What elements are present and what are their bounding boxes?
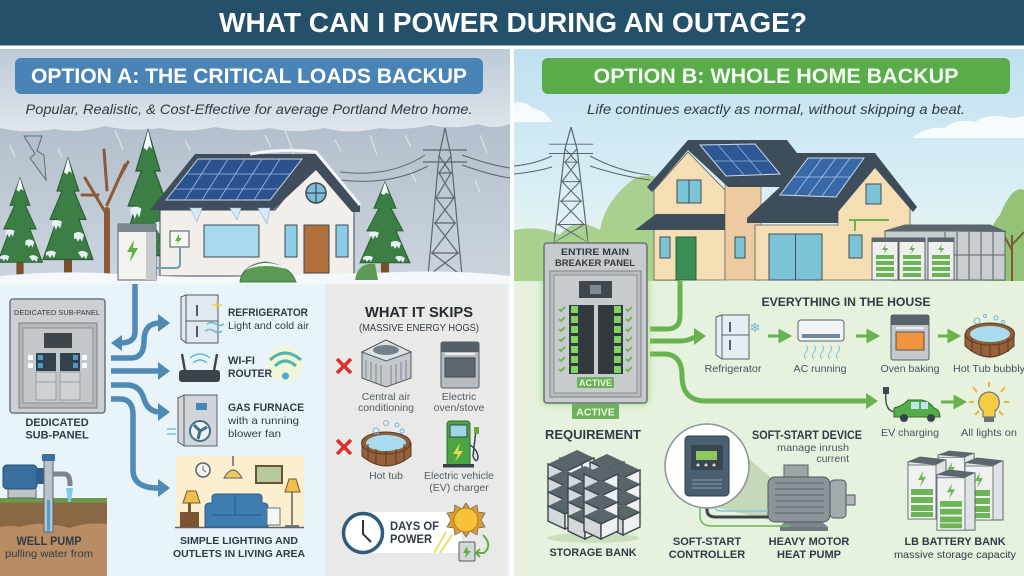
controller xyxy=(685,436,729,496)
label: soft-start device xyxy=(752,430,862,465)
sub-panel: DEDICATED SUB-PANEL xyxy=(14,308,100,317)
section heading: option A: OPTION A: THE CRITICAL LOADS BACKUP xyxy=(31,65,467,88)
main breaker panel: BREAKER PANEL xyxy=(555,258,635,269)
label: battery bank xyxy=(894,536,1017,561)
item: light bulb: All lights on xyxy=(961,427,1017,439)
x mark row 1 xyxy=(337,359,351,373)
clouds xyxy=(514,102,1024,138)
item: AC xyxy=(794,320,847,375)
section heading: option B xyxy=(542,58,1010,94)
panel: what it skips xyxy=(326,284,507,576)
item: gas furnace: GAS FURNACE xyxy=(228,402,304,414)
motor xyxy=(768,465,855,531)
label: EV charger: Electric vehicle xyxy=(424,470,494,482)
panel: option B xyxy=(514,49,1024,576)
label: hot tub: Hot tub xyxy=(369,470,403,482)
two-storey house xyxy=(635,140,917,280)
green conduit xyxy=(849,220,889,231)
icon: EV charger xyxy=(443,421,479,468)
icon: battery xyxy=(459,535,488,561)
well pump xyxy=(0,454,107,576)
power tower xyxy=(514,127,650,242)
panel: option A xyxy=(0,49,510,576)
breaker columns xyxy=(559,305,632,374)
storage bank xyxy=(547,450,640,543)
label: heavy motor: HEAT PUMP xyxy=(777,549,841,561)
label: central air: conditioning xyxy=(358,402,414,414)
heading: WHAT IT SKIPS xyxy=(365,304,473,321)
item: AC: AC running xyxy=(794,363,847,375)
sky scene xyxy=(514,49,1024,281)
icicles xyxy=(190,208,270,224)
solar panels xyxy=(700,144,780,176)
wires xyxy=(700,496,790,526)
well pump: WELL PUMP xyxy=(16,536,82,548)
item: wi-fi router xyxy=(179,346,303,382)
icon: hot tub xyxy=(362,420,411,466)
arrow xyxy=(938,331,958,341)
label: soft-start device: current xyxy=(816,453,849,465)
label: central air: Central air xyxy=(362,391,411,403)
house with solar panels xyxy=(150,150,360,276)
title bar: WHAT CAN I POWER DURING AN OUTAGE? xyxy=(219,7,807,38)
active tag: ACTIVE xyxy=(576,406,615,418)
green feeds xyxy=(650,281,878,409)
item: wi-fi router: WI-FI xyxy=(228,355,255,367)
main breaker panel xyxy=(544,243,647,403)
label: battery bank: massive storage capacity xyxy=(894,549,1017,561)
days of power badge: DAYS OF xyxy=(390,519,439,533)
active tag inner: ACTIVE xyxy=(579,378,612,388)
lightning bolt xyxy=(24,136,46,180)
item: light bulb xyxy=(961,382,1017,439)
title bar xyxy=(0,0,1024,46)
item: refrigerator xyxy=(181,295,309,343)
item: refrigerator: REFRIGERATOR xyxy=(228,307,308,319)
item: refrigerator: ❄ xyxy=(750,320,760,335)
trees xyxy=(0,130,410,276)
LB battery bank xyxy=(908,451,1003,530)
label: heavy motor: HEAVY MOTOR xyxy=(769,536,849,548)
icon: central air xyxy=(362,340,411,387)
power tower with lines xyxy=(340,128,510,276)
label: soft-start controller: SOFT-START xyxy=(673,536,741,548)
section heading: option A xyxy=(15,58,483,94)
label: battery bank: LB BATTERY BANK xyxy=(904,536,1006,548)
label: oven: oven/stove xyxy=(434,402,485,414)
icon: sun xyxy=(434,503,485,553)
storm scene background xyxy=(0,49,510,284)
sub-panel label: DEDICATED xyxy=(25,417,89,429)
section heading: option B: OPTION B: WHOLE HOME BACKUP xyxy=(594,65,958,88)
item: oven: Oven baking xyxy=(880,363,940,375)
item: EV xyxy=(881,387,940,439)
subtitle B: Life continues exactly as normal, without skipping a beat. xyxy=(587,101,965,117)
arrow xyxy=(768,331,789,341)
sub-panel xyxy=(10,299,105,413)
item: living area xyxy=(173,456,305,560)
active tag xyxy=(572,404,619,419)
label: soft-start device: manage inrush xyxy=(777,442,849,454)
sub-panel label: SUB-PANEL xyxy=(25,430,89,442)
item: refrigerator xyxy=(704,315,762,375)
windows and doors xyxy=(660,180,881,280)
main breaker panel: ENTIRE MAIN xyxy=(561,247,629,258)
item: refrigerator: Light and cold air xyxy=(228,320,309,332)
arrows from sub-panel xyxy=(111,284,160,488)
label: oven: Electric xyxy=(442,391,476,403)
icon: stove xyxy=(441,342,479,388)
bare tree xyxy=(82,150,128,272)
wi-fi symbol xyxy=(267,346,303,382)
label: soft-start controller: CONTROLLER xyxy=(669,549,745,561)
item: refrigerator: Refrigerator xyxy=(704,363,762,375)
arrow xyxy=(856,331,877,341)
battery bank by house xyxy=(872,225,1006,280)
snow ground and bushes xyxy=(0,262,510,284)
label: soft-start device: SOFT-START DEVICE xyxy=(752,430,862,442)
heading: everything in the house: EVERYTHING IN THE HOUSE xyxy=(762,295,930,309)
label: EV charger: (EV) charger xyxy=(429,482,489,494)
bushes xyxy=(514,176,680,281)
section: sub-panel flows xyxy=(10,284,170,497)
arrow xyxy=(941,397,964,407)
label: storage bank: STORAGE BANK xyxy=(550,547,637,559)
subheading: (MASSIVE ENERGY HOGS) xyxy=(359,322,479,334)
battery unit xyxy=(118,224,156,280)
days of power badge xyxy=(344,503,488,561)
item: wi-fi router: ROUTER xyxy=(228,368,272,380)
item: hot tub: Hot Tub bubbly xyxy=(953,363,1024,375)
soft-start controller with heavy motor xyxy=(665,424,855,531)
x mark row 2 xyxy=(337,440,351,454)
subtitle A: Popular, Realistic, & Cost-Effective for average Portland Metro home. xyxy=(26,101,472,117)
days of power badge: POWER xyxy=(390,532,432,546)
roofs xyxy=(647,140,797,192)
heading: requirement: REQUIREMENT xyxy=(545,427,641,442)
item: living area: OUTLETS IN LIVING AREA xyxy=(173,548,305,560)
item: gas furnace: blower fan xyxy=(228,428,281,440)
item: hot tub xyxy=(953,314,1024,375)
item: oven xyxy=(880,315,940,375)
item: EV: EV charging xyxy=(881,427,939,439)
item: gas furnace: with a running xyxy=(227,415,299,427)
item: gas furnace xyxy=(167,395,304,446)
item: living area: SIMPLE LIGHTING AND xyxy=(180,535,298,547)
well pump: pulling water from xyxy=(5,548,93,560)
